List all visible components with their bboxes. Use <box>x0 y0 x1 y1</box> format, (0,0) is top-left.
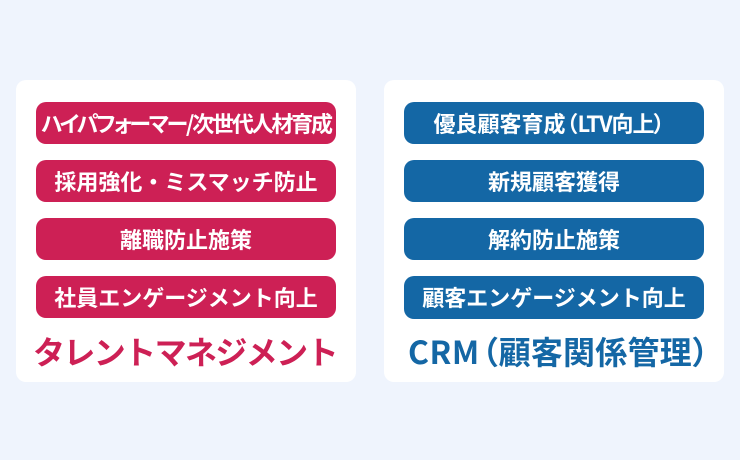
item: new customer acquisition <box>404 160 704 202</box>
item: customer engagement <box>404 276 704 319</box>
item: loyal customer development: 優良顧客育成（LTV向上） <box>433 107 664 139</box>
panel: talent management <box>16 80 356 382</box>
item: new customer acquisition: 新規顧客獲得 <box>488 165 620 197</box>
item: employee engagement <box>36 276 336 318</box>
item: recruiting and mismatch prevention <box>36 160 336 202</box>
item: churn prevention: 解約防止施策 <box>488 223 620 255</box>
heading: CRM: CRM（顧客関係管理） <box>408 328 709 374</box>
item: churn prevention <box>404 218 704 260</box>
item: customer engagement: 顧客エンゲージメント向上 <box>422 281 686 313</box>
item: employee engagement: 社員エンゲージメント向上 <box>54 281 318 313</box>
item: turnover prevention: 離職防止施策 <box>120 223 252 255</box>
item: loyal customer development <box>404 102 704 144</box>
item: high performers and next generation development: ハイパフォーマー/次世代人材育成 <box>41 107 331 139</box>
heading: talent management: タレントマネジメント <box>33 328 337 374</box>
panel: CRM <box>384 80 724 382</box>
item: turnover prevention <box>36 218 336 260</box>
item: recruiting and mismatch prevention: 採用強化・ミスマッチ防止 <box>54 165 318 197</box>
